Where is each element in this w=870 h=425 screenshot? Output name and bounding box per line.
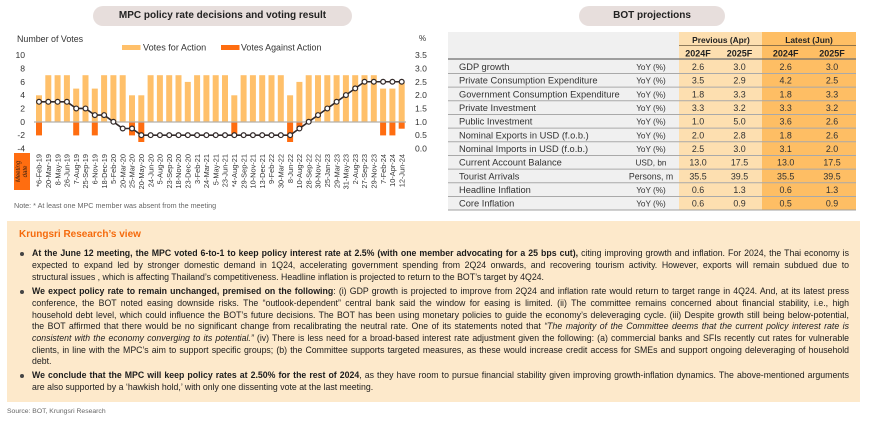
table values: latest 2025F: 2.0: [826, 144, 838, 154]
bullet 1 text: [32, 248, 849, 282]
heading: MPC policy rate decisions: [93, 6, 352, 26]
bullet 1 marker: [20, 252, 24, 256]
x axis: meeting dates: 29-Sep-21: [239, 154, 248, 189]
table values: previous 2025F: 3.0: [733, 144, 746, 154]
table values: previous 2024F: [689, 62, 707, 209]
left axis labels: 0: [20, 117, 25, 127]
right axis labels: 1.5: [415, 104, 427, 114]
legend: votes for action: Votes for Action: [143, 42, 206, 52]
x axis: meeting dates: 20-May-20: [137, 154, 146, 189]
label box: meeting date: Meeting: [16, 160, 22, 182]
x axis: meeting dates: 10-Aug-22: [295, 154, 304, 189]
right axis labels: [415, 50, 427, 154]
table values: latest 2024F: 3.3: [780, 103, 792, 113]
bars: votes against action: [36, 122, 405, 142]
axis title: number of votes: Number of Votes: [17, 34, 84, 44]
table rows: units: USD, bn: [636, 159, 667, 168]
table values: latest 2025F: 3.2: [826, 103, 838, 113]
table values: latest 2025F: 17.5: [823, 158, 841, 168]
table values: previous 2024F: 3.3: [692, 103, 704, 113]
table rows: indicator names: Headline Inflation: [459, 185, 531, 195]
table values: latest 2024F: 35.5: [777, 171, 794, 181]
x axis: meeting dates: 9-Feb-22: [267, 154, 276, 184]
table values: latest 2025F: 2.5: [826, 76, 838, 86]
table values: previous 2024F: 3.5: [692, 76, 704, 86]
panel heading: Krungsri Research’s view: [19, 229, 141, 240]
table rows: units: YoY (%): [636, 131, 666, 140]
x axis: meeting dates: 7-Aug-19: [72, 154, 81, 184]
source note: Source: BOT, Krungsri Research: [7, 408, 106, 415]
left axis labels: -4: [17, 144, 25, 154]
table values: latest 2025F: 0.9: [826, 199, 838, 209]
table values: latest 2024F: 1.8: [780, 89, 792, 99]
table header: 2024F: [773, 48, 799, 58]
x axis: meeting dates: 25-Mar-20: [128, 154, 137, 188]
x axis: meeting dates: 24-Mar-21: [202, 154, 211, 188]
left axis labels: 10: [15, 50, 25, 60]
table values: previous 2025F: 1.3: [733, 185, 746, 195]
bullet 2 text: the BOT affirmed that there would be no significant change from recalibrating the neutral rate. One of its statements noted that “The majority of the Committee deems that the current policy interest rate is: [32, 321, 849, 331]
x axis: meeting dates: 8-May-19: [53, 154, 62, 185]
x axis: meeting dates: 18-Nov-20: [174, 154, 183, 189]
chart: votes and policy rate: [14, 34, 427, 190]
legend: votes against action: Votes Against Action: [241, 42, 321, 52]
x axis: meeting dates: 29-Mar-23: [332, 154, 341, 188]
bars: votes for action: [36, 75, 405, 122]
x axis: meeting dates: 26-Jun-19: [63, 154, 72, 187]
table rows: indicator names: Public Investment: [459, 117, 533, 127]
table values: latest 2024F: 0.5: [780, 199, 792, 209]
table header: Latest (Jun): [785, 35, 833, 45]
table header: Previous (Apr): [692, 35, 750, 45]
table values: previous 2024F: 2.0: [692, 130, 704, 140]
table values: previous 2024F: 2.5: [692, 144, 704, 154]
right axis labels: 3.5: [415, 50, 427, 60]
table rows: units: YoY (%): [636, 145, 666, 154]
x axis: meeting dates: 23-Jun-21: [221, 154, 230, 187]
x axis: meeting dates: 27-Sep-23: [360, 154, 369, 189]
table rows: indicator names: Private Consumption Expenditure: [459, 76, 598, 86]
table values: latest 2024F: 4.2: [780, 76, 792, 86]
table values: latest 2025F: 2.6: [826, 130, 838, 140]
x axis: meeting dates: 23-Sep-20: [165, 154, 174, 189]
table rows: units: YoY (%): [636, 104, 666, 113]
table values: previous 2024F: 0.6: [692, 185, 704, 195]
table rows: units: YoY (%): [636, 90, 666, 99]
x axis: meeting dates: 5-May-21: [211, 154, 220, 185]
x axis: meeting dates: 12-Jun-24: [397, 154, 406, 187]
table rows: indicator names: Nominal Imports in USD (f.o.b.): [459, 144, 588, 154]
table rows: units: [629, 63, 673, 209]
bullet 2 text: consistent with the economy converging to its potential.” (iv) There is less need for a broad-based interest rate adjustment given the following: (a) commercial banks and SFIs recently cut rates for vulnerable: [32, 333, 849, 343]
x axis: meeting dates: 10-Nov-21: [249, 154, 258, 189]
x axis: meeting dates: 20-Mar-20: [118, 154, 127, 188]
heading: BOT projections: BOT projections: [613, 10, 691, 21]
x axis: meeting dates: 30-Mar-22: [276, 154, 286, 188]
x axis: meeting dates: 2-Aug-23: [351, 154, 360, 184]
x axis: meeting dates: 29-Nov-23: [370, 154, 378, 189]
left axis labels: -2: [17, 130, 25, 140]
table rows: indicator names: [459, 62, 620, 209]
label box: meeting date: date: [23, 165, 29, 177]
table rows: units: YoY (%): [636, 186, 666, 195]
note: absent member: Note: * At least one MPC member was absent from the meeting: [14, 201, 216, 210]
table values: latest 2025F: 39.5: [823, 171, 841, 181]
bullet 2 text: debt.: [32, 356, 51, 366]
table values: previous 2025F: 3.2: [733, 103, 746, 113]
table rows: units: YoY (%): [636, 77, 666, 86]
bullet 2 text: conference, the BOT noted easing downside risks. The “outlook-dependent” central bank said the window for easing is limited. (ii) The committee remains concerned about financial stability, i.e., high: [32, 298, 849, 308]
x axis: meeting dates: 20-Mar-19: [44, 154, 53, 188]
x axis: meeting dates: 18-Dec-19: [100, 154, 109, 189]
table values: latest 2024F: 13.0: [777, 158, 794, 168]
bullet 2 text: clients, in line with the MPC’s aim to support specific groups; (b) the Committee supports targeted measures, as these would increase credit access for SMEs and support ongoing deleveraging of household: [32, 345, 849, 355]
table rows: indicator names: Core Inflation: [459, 199, 514, 209]
bullet 3 text: We conclude that the MPC will keep policy rates at 2.50% for the rest of 2024, as they have room to pursue financial stability given improving growth-inflation dynamics. The above-mentioned arguments: [32, 370, 849, 380]
bullet 1 text: At the June 12 meeting, the MPC voted 6-to-1 to keep policy interest rate at 2.5% (with one member advocating for a 25 bps cut), citing improving growth and inflation. For 2024, the Thai economy is: [32, 248, 849, 258]
left axis labels: [15, 50, 25, 154]
x axis: meeting dates: 28-Sep-22: [304, 154, 313, 189]
x axis: meeting dates: 8-Jun-22: [286, 154, 295, 183]
bullet 2 text: [32, 286, 849, 366]
left axis labels: 4: [20, 90, 25, 100]
x axis: meeting dates: 10-Apr-24: [388, 154, 397, 187]
x axis: meeting dates: 3-Feb-21: [193, 154, 202, 184]
table rows: units: YoY (%): [636, 118, 666, 127]
table values: latest 2024F: 3.1: [780, 144, 792, 154]
right axis labels: 3.0: [415, 64, 427, 74]
x axis: meeting dates: 25-Sep-19: [81, 154, 90, 189]
table header: 2024F: [685, 48, 711, 58]
table values: latest 2025F: 3.0: [826, 62, 838, 72]
x axis: meeting dates: 7-Feb-24: [379, 154, 388, 184]
right axis labels: 0.0: [415, 144, 427, 154]
bullet 1 text: structural issues , which is affecting Thailand’s competitiveness. Headline inflation is projected to return to the BOT’s target by 4Q24.: [32, 272, 544, 282]
table values: previous 2025F: 2.9: [733, 76, 746, 86]
table values: previous 2024F: 2.6: [692, 62, 704, 72]
panel: Krungsri Research's view: [7, 221, 860, 402]
table values: latest 2024F: 0.6: [780, 185, 792, 195]
table values: previous 2025F: 0.9: [733, 199, 746, 209]
x axis: meeting dates: 23-Dec-20: [184, 154, 192, 189]
table header: 2025F: [819, 48, 845, 58]
table values: previous 2025F: 5.0: [733, 117, 746, 127]
table values: previous 2025F: 3.3: [733, 89, 746, 99]
x axis: meeting dates: 5-Feb-20: [109, 154, 118, 184]
table values: latest 2025F: 2.6: [826, 117, 838, 127]
table header: [685, 35, 845, 58]
table values: latest 2025F: [823, 62, 841, 209]
table values: previous 2024F: 1.0: [692, 117, 704, 127]
table values: previous 2025F: 2.8: [733, 130, 746, 140]
x axis: meeting dates: *6-Feb-19: [35, 154, 44, 187]
left axis labels: 2: [20, 104, 25, 114]
right axis labels: 2.5: [415, 77, 427, 87]
table values: previous 2025F: [731, 62, 748, 209]
x axis: meeting dates: *4-Aug-21: [230, 154, 239, 187]
bullet 3 text: [32, 370, 849, 392]
bullet 3 marker: [20, 374, 24, 378]
table rows: units: Persons, m: [629, 171, 673, 181]
table rows: units: YoY (%): [636, 200, 666, 209]
table values: latest 2024F: 2.6: [780, 62, 792, 72]
right axis labels: 1.0: [415, 117, 427, 127]
table values: latest 2024F: 1.8: [780, 130, 792, 140]
x axis: meeting dates: 6-Nov-19: [90, 154, 100, 184]
x axis: meeting dates: 31-May-23: [342, 154, 351, 189]
bullet 2 marker: [20, 290, 24, 294]
x axis: meeting dates: 30-Nov-22: [314, 154, 323, 189]
table values: previous 2025F: 17.5: [731, 158, 748, 168]
x axis: meeting dates: [35, 154, 406, 189]
x axis: meeting dates: 24-Jun-20: [146, 154, 155, 187]
right axis labels: 0.5: [415, 130, 427, 140]
left axis labels: 6: [20, 77, 25, 87]
right axis labels: 2.0: [415, 90, 427, 100]
table rows: indicator names: Tourist Arrivals: [459, 171, 520, 181]
table rows: indicator names: Private Investment: [459, 103, 536, 113]
table: BOT projections: [448, 32, 856, 210]
bullet 2 text: We expect policy rate to remain unchanged, premised on the following: (i) GDP growth is projected to improve from 2Q24 and inflation rate would return to target range in 4Q24. And, at its latest press: [32, 286, 849, 296]
table values: previous 2024F: 0.6: [692, 199, 704, 209]
line: policy rate: [39, 82, 402, 135]
left axis labels: 8: [20, 64, 25, 74]
table rows: indicator names: Current Account Balance: [459, 158, 562, 168]
table rows: indicator names: Nominal Exports in USD (f.o.b.): [459, 130, 589, 140]
table values: previous 2024F: 35.5: [689, 171, 707, 181]
table rows: indicator names: Government Consumption Expenditure: [459, 89, 620, 99]
bullet 2 text: household debt level, which could influence the BOT’s future decisions. The BOT has been using monetary policies to guide the economy’s deleveraging cycle. (iii) Despite growth still being below-potential,: [32, 310, 849, 320]
table rows: units: YoY (%): [636, 63, 666, 72]
table values: latest 2024F: 3.6: [780, 117, 792, 127]
table values: previous 2024F: 13.0: [689, 158, 707, 168]
table rows: indicator names: GDP growth: [459, 62, 509, 72]
heading: MPC policy rate decisions: MPC policy rate decisions and voting result: [119, 10, 326, 21]
table values: previous 2025F: 39.5: [731, 171, 748, 181]
axis title: percent: %: [419, 34, 426, 43]
table values: latest 2025F: 1.3: [826, 185, 838, 195]
x axis: meeting dates: 5-Aug-20: [156, 154, 165, 184]
table values: previous 2024F: 1.8: [692, 89, 704, 99]
table values: previous 2025F: 3.0: [733, 62, 746, 72]
table values: latest 2024F: [777, 62, 794, 209]
table values: latest 2025F: 3.3: [826, 89, 838, 99]
x axis: meeting dates: 13-Dec-21: [258, 154, 267, 189]
x axis: meeting dates: 25-Jan-23: [323, 154, 332, 187]
bullet 1 text: expected to expand led by stronger domestic demand in 1Q24, accelerating government spending from 2Q24 onwards, and recovering tourism activity. However, exports will remain subdued due to: [32, 260, 849, 270]
heading: BOT projections: [579, 6, 725, 26]
table header: 2025F: [727, 48, 753, 58]
label box: meeting date: [14, 153, 30, 190]
bullet 3 text: are also supported by a ‘hawkish hold,’ with only one dissenting vote at the last meeting.: [32, 382, 373, 392]
